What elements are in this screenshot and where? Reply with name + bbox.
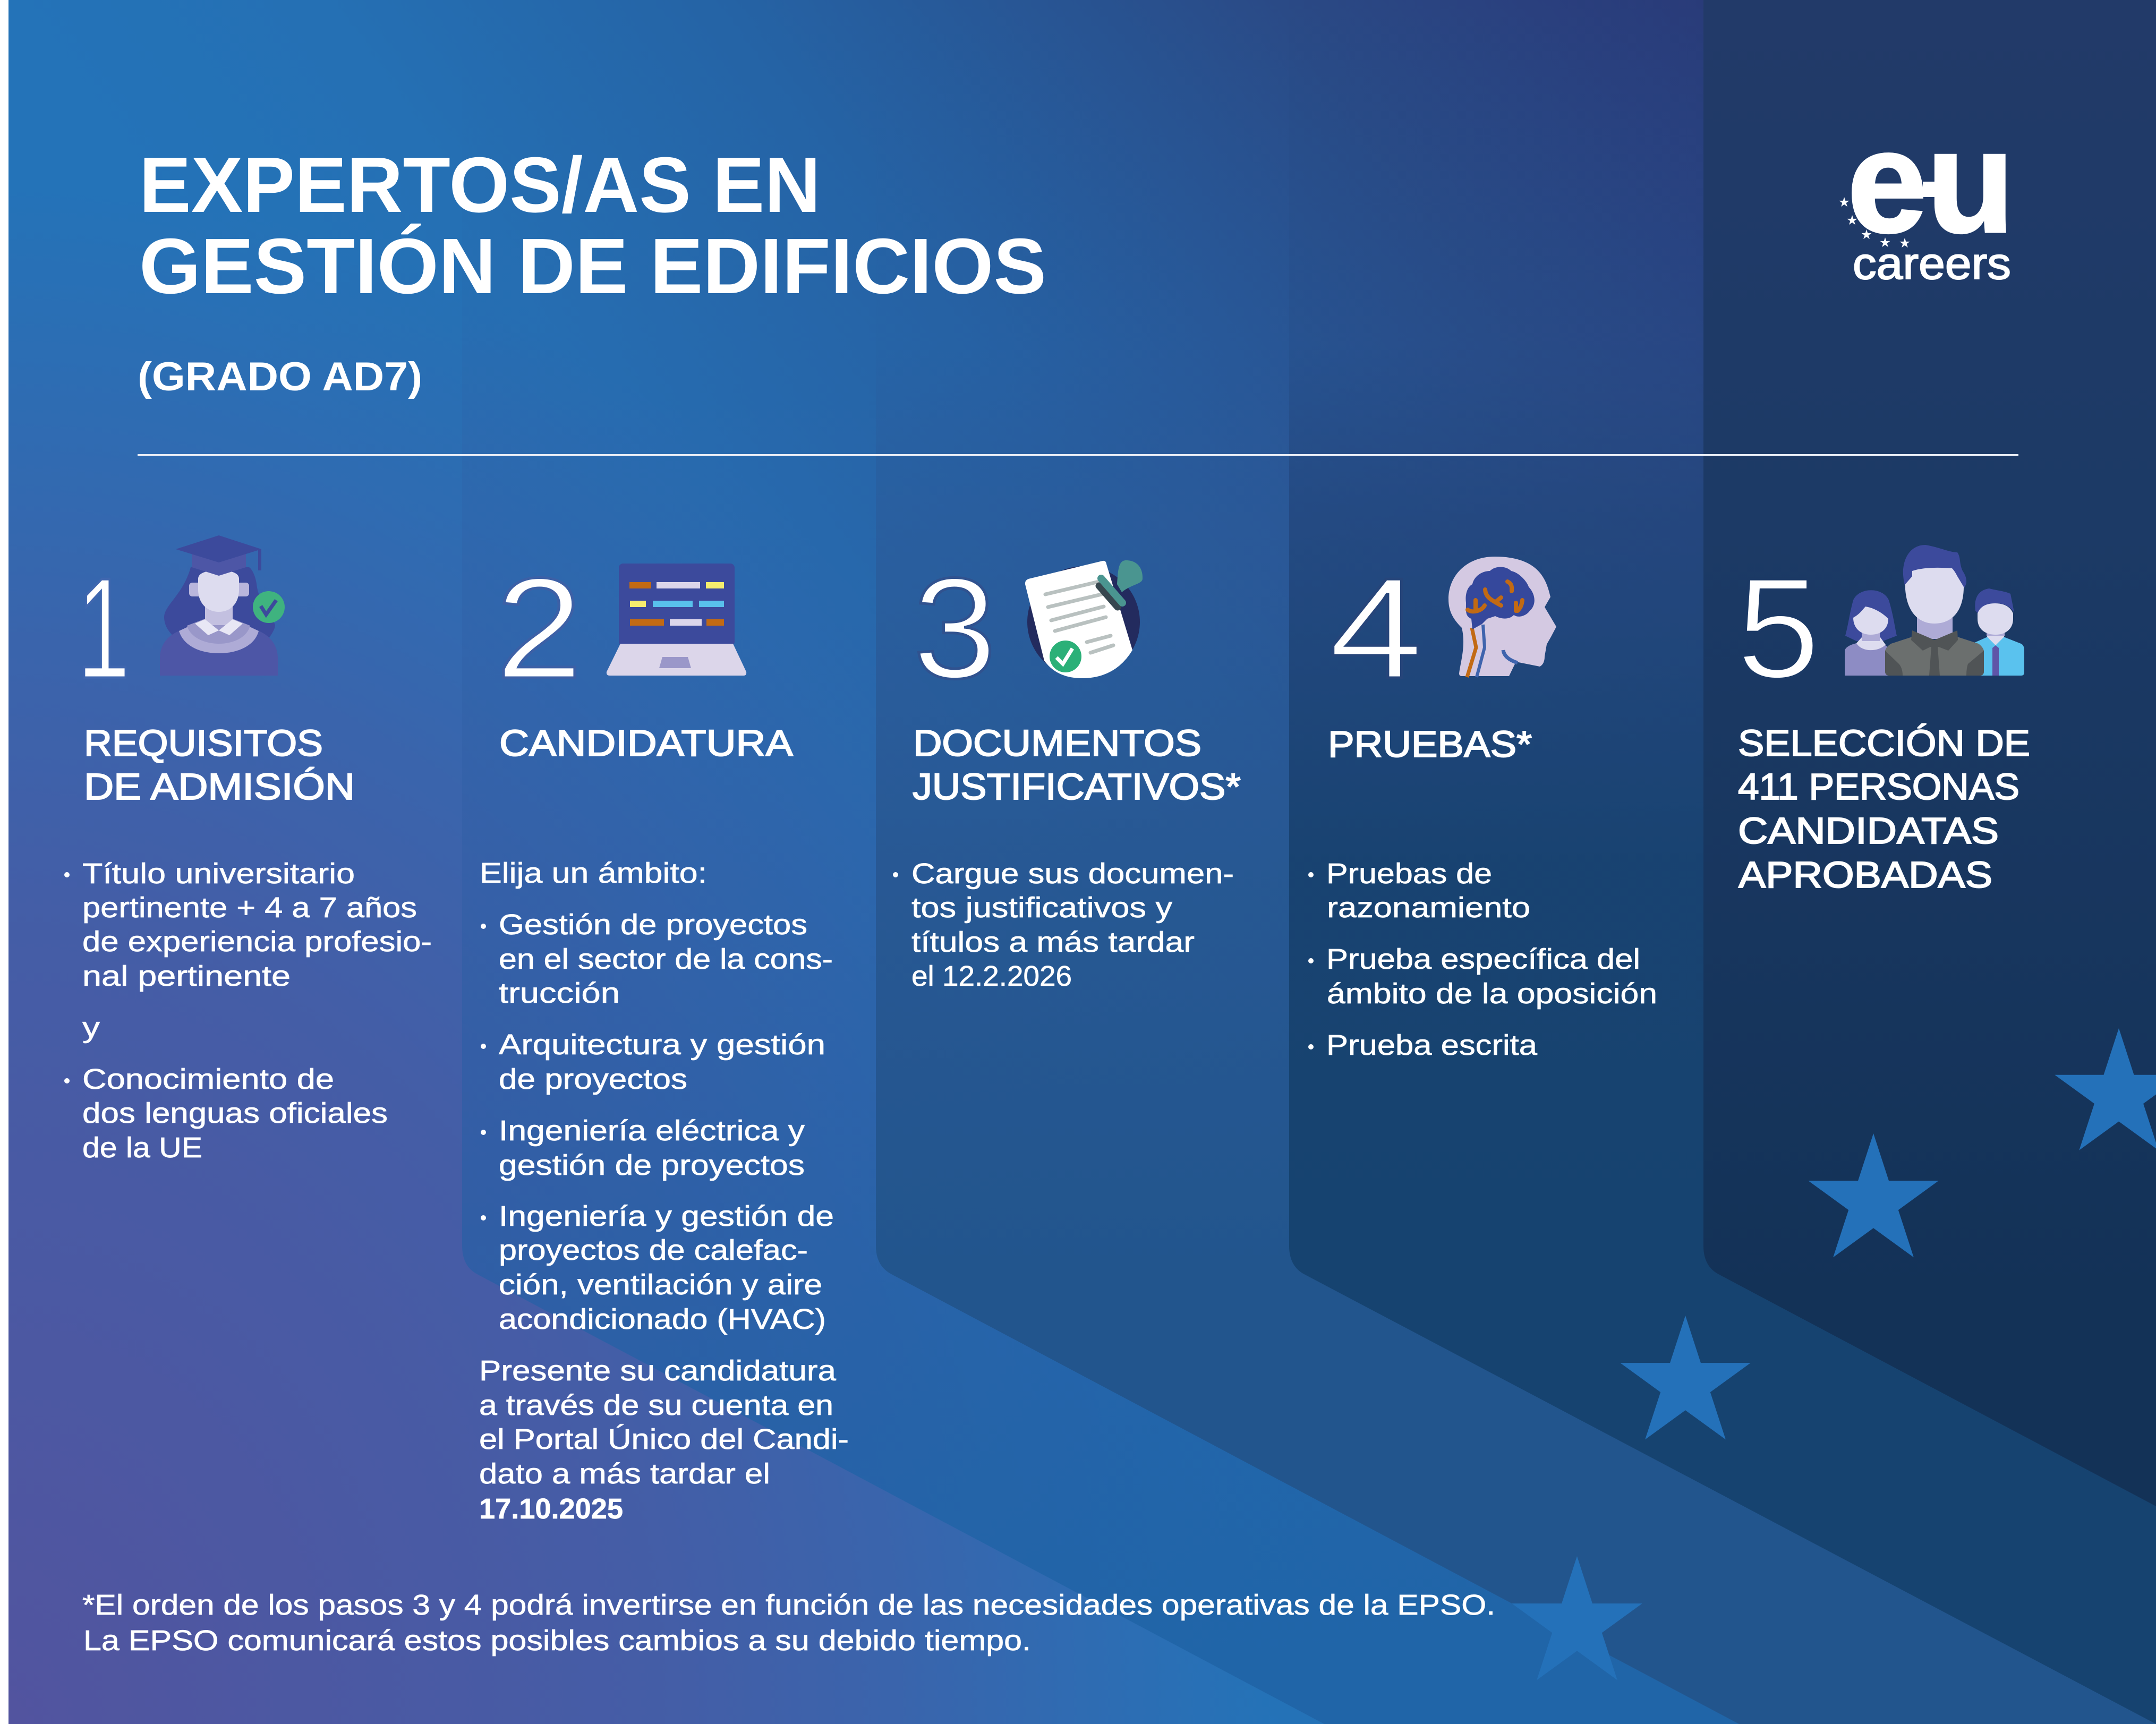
text block	[1308, 858, 1657, 1061]
heading	[913, 722, 1241, 807]
text block: Prueba escrita	[1326, 1029, 1538, 1061]
number 3: 3	[913, 549, 996, 709]
text block: proyectos de calefac-	[499, 1234, 808, 1266]
number 5: 5	[1736, 549, 1820, 709]
heading: REQUISITOS	[84, 722, 323, 764]
text block: gestión de proyectos	[499, 1149, 805, 1181]
text block: a través de su cuenta en	[479, 1389, 833, 1421]
heading	[1738, 722, 2030, 895]
panel: step 3 documentos	[893, 549, 1241, 992]
footnote: La EPSO comunicará estos posibles cambios a su debido tiempo.	[83, 1625, 1031, 1657]
text block: y	[82, 1012, 100, 1044]
text block: Pruebas de	[1326, 858, 1492, 890]
text block: Cargue sus documen-	[911, 858, 1234, 890]
text block: dos lenguas oficiales	[82, 1097, 388, 1129]
logo: eu careers: careers	[1853, 238, 2011, 288]
title: GESTIÓN DE EDIFICIOS	[139, 223, 1046, 310]
text block: ción, ventilación y aire	[499, 1269, 822, 1301]
text block: trucción	[499, 977, 620, 1009]
heading	[84, 722, 355, 807]
footnote: *El orden de los pasos 3 y 4 podrá invertirse en función de las necesidades operativas de la EPSO.	[82, 1589, 1495, 1621]
text block: pertinente + 4 a 7 años	[82, 892, 417, 924]
heading: PRUEBAS*	[1328, 723, 1532, 765]
text block: ámbito de la oposición	[1327, 978, 1657, 1010]
icon: three people	[1845, 545, 2024, 676]
text block: el 12.2.2026	[911, 960, 1072, 992]
subtitle: (GRADO AD7)	[138, 354, 422, 399]
heading: CANDIDATURA	[499, 722, 793, 764]
text block: el Portal Único del Candi-	[479, 1423, 849, 1455]
icon: graduate	[160, 535, 285, 676]
icon: stamped document	[1025, 560, 1143, 678]
text block: Ingeniería eléctrica y	[499, 1115, 805, 1147]
text block: de experiencia profesio-	[82, 926, 432, 958]
text block	[64, 858, 432, 1164]
number 4: 4	[1329, 549, 1423, 709]
logo: eu careers: eu	[1847, 101, 2014, 262]
text block: Conocimiento de	[82, 1063, 334, 1095]
heading: DE ADMISIÓN	[84, 766, 355, 807]
text block: Título universitario	[82, 858, 355, 890]
number 1: 1	[77, 549, 130, 709]
heading: APROBADAS	[1739, 854, 1992, 895]
text block: Ingeniería y gestión de	[499, 1200, 834, 1232]
text block: dato a más tardar el	[479, 1458, 770, 1490]
icon: decorative large stars	[1512, 1028, 2156, 1680]
footnote	[82, 1589, 1495, 1657]
icon: laptop	[607, 564, 746, 676]
text block: nal pertinente	[82, 960, 291, 992]
panel: step 5 seleccion	[1736, 545, 2030, 895]
text block: de la UE	[82, 1132, 202, 1164]
text block: Arquitectura y gestión	[499, 1029, 825, 1061]
panel: step 2 candidatura	[479, 549, 849, 1525]
text block: en el sector de la cons-	[499, 943, 833, 975]
heading: SELECCIÓN DE	[1738, 722, 2030, 764]
title: EXPERTOS/AS EN	[139, 141, 821, 229]
title	[139, 141, 1046, 310]
text block	[893, 858, 1234, 992]
panel: step 4 pruebas	[1308, 549, 1657, 1061]
text block: Elija un ámbito:	[480, 857, 707, 889]
number 2: 2	[496, 549, 583, 709]
text block: tos justificativos y	[911, 892, 1172, 924]
text block: razonamiento	[1327, 892, 1530, 924]
heading: DOCUMENTOS	[913, 722, 1201, 764]
panel: step 1 requisitos	[64, 535, 432, 1164]
text block	[479, 857, 849, 1525]
heading: JUSTIFICATIVOS*	[913, 766, 1241, 807]
icon: head with brain	[1448, 557, 1556, 677]
text block: acondicionado (HVAC)	[499, 1303, 826, 1335]
text block: Presente su candidatura	[479, 1355, 837, 1387]
text block: Gestión de proyectos	[499, 909, 807, 941]
text block: títulos a más tardar	[911, 926, 1195, 958]
text block: Prueba específica del	[1326, 943, 1640, 975]
heading: 411 PERSONAS	[1738, 766, 2019, 807]
heading: CANDIDATAS	[1738, 810, 1999, 851]
text block: 17.10.2025	[479, 1493, 623, 1525]
text block: de proyectos	[499, 1063, 687, 1095]
